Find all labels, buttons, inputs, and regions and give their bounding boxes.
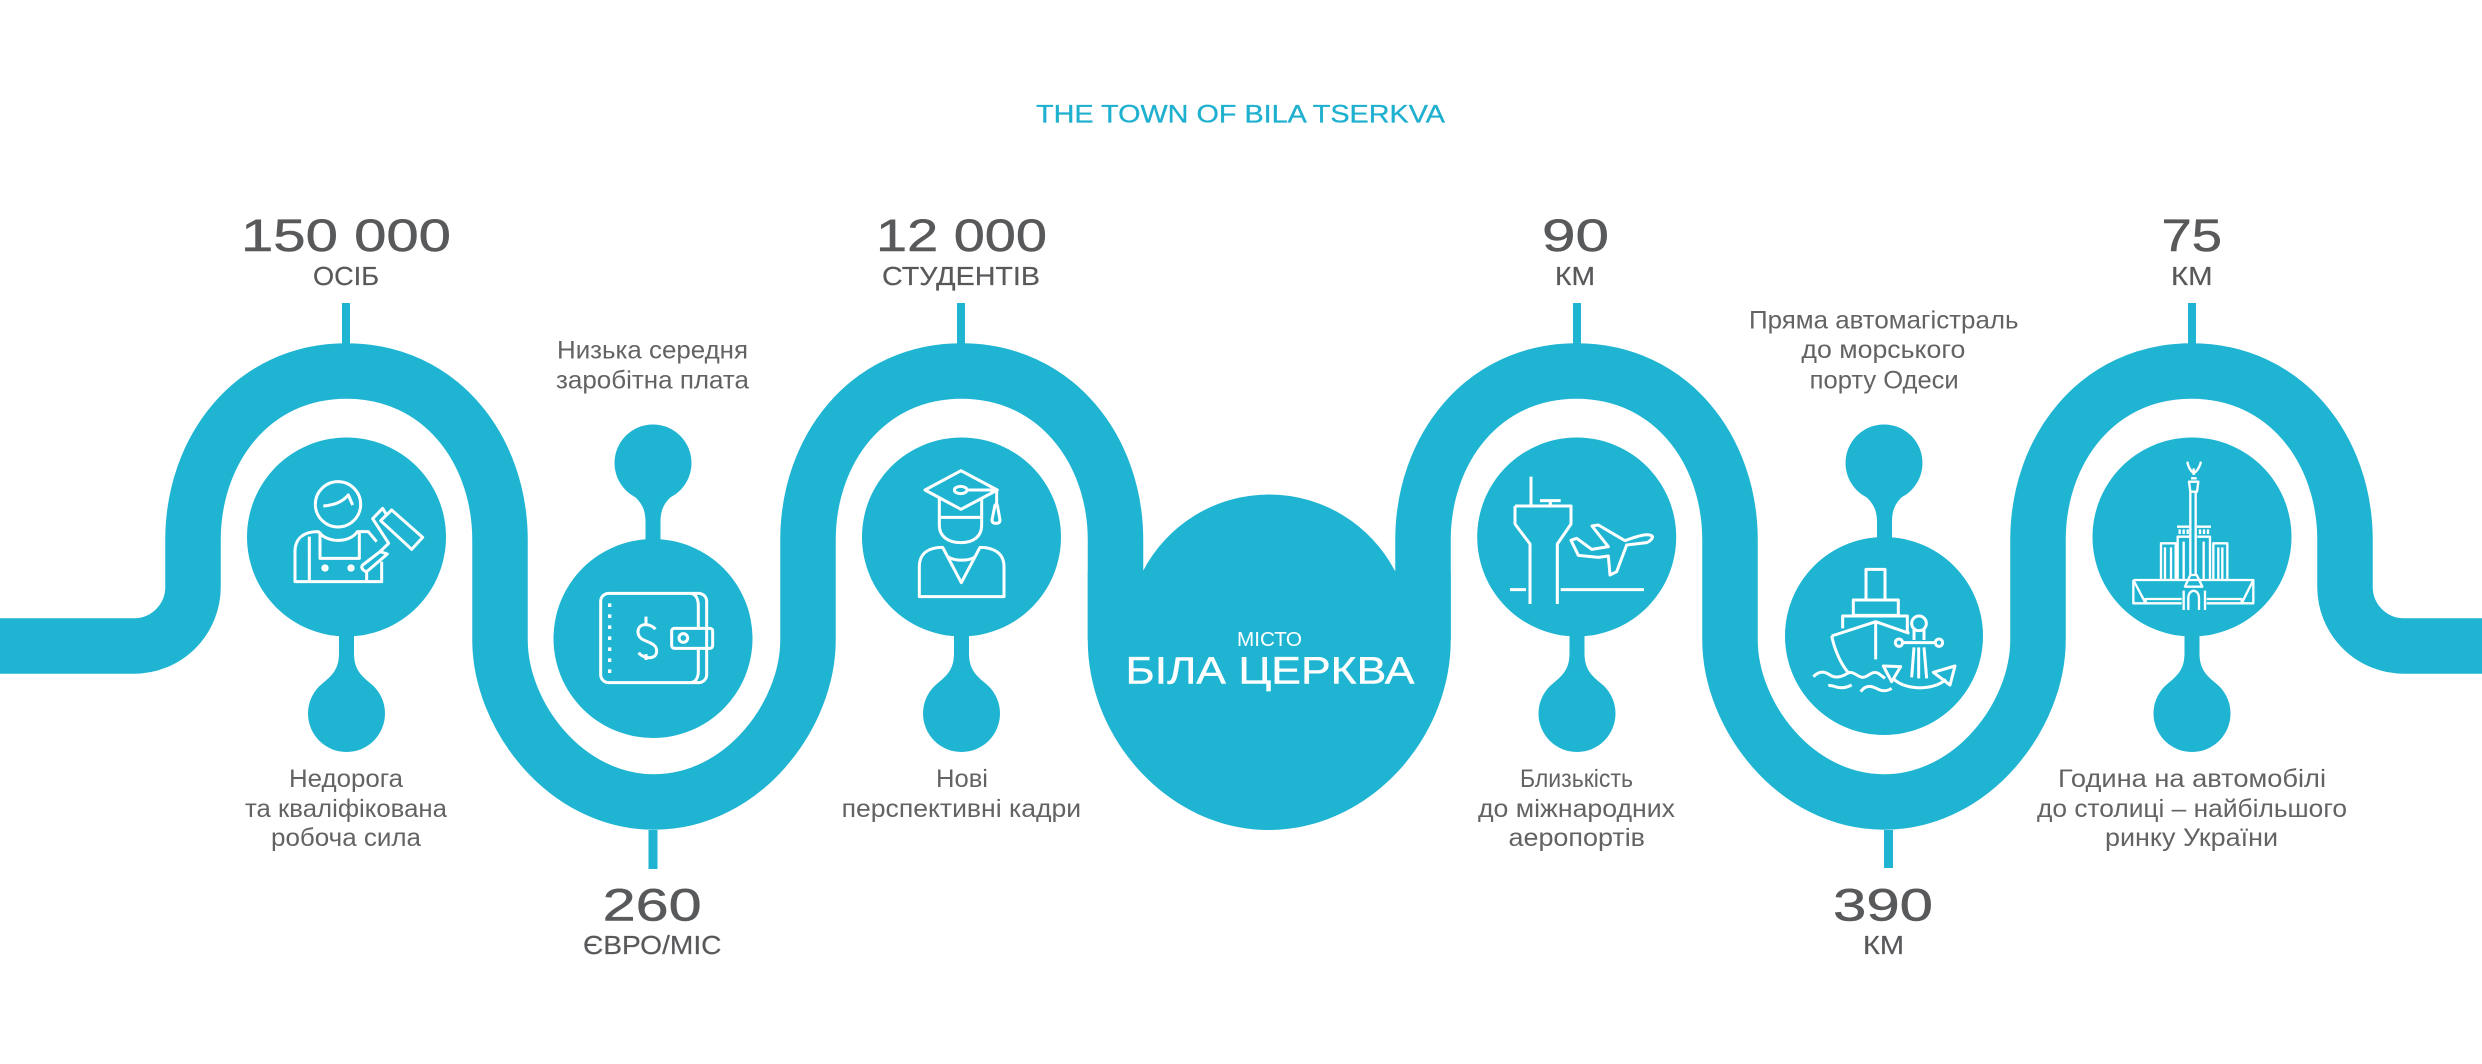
description [245,765,447,852]
stat: 390 km: КМ [1863,930,1904,960]
description: перспективні кадри [842,795,1081,823]
node circle with pin [2092,438,2292,752]
description: робоча сила [271,824,421,852]
description [1749,306,2018,394]
stat: 260 euro per month: ЄВРО/МІС [583,930,722,960]
description [1478,765,1676,852]
stat: 260 euro per month: 260 [603,880,702,930]
description: ринку України [2105,824,2278,852]
stat: 90 km [1542,210,1609,345]
stat: 75 km: 75 [2162,210,2222,261]
central circle: Bila Tserkva [1088,494,1451,830]
winding road band [0,371,2482,802]
icon: wallet [601,593,713,683]
description: та кваліфікована [245,795,447,823]
node circle with pin [1785,424,1983,735]
description: порту Одеси [1810,366,1959,394]
node circle with pin [1477,438,1676,752]
icon: control tower and plane [1510,477,1653,604]
stat: 150 000 people: ОСІБ [313,261,379,291]
stat: 12 000 students [876,210,1047,345]
description: Близькість [1520,765,1633,793]
stat: 90 km: КМ [1555,261,1595,291]
panel: airports [1477,210,1676,852]
panel: students [842,210,1081,823]
description [556,337,749,394]
panel: workforce [241,210,451,852]
description: Недорога [289,765,403,793]
stat: 260 euro per month [583,830,722,960]
panel: salary [554,337,752,960]
stat: 12 000 students: 12 000 [876,210,1047,261]
node circle with pin [554,424,752,738]
panel: capital [2037,210,2347,852]
icon: graduate [919,471,1004,597]
stat: 75 km [2162,210,2222,345]
stat: 12 000 students: СТУДЕНТІВ [882,261,1040,291]
stat: 150 000 people [241,210,451,345]
node circle with pin [862,438,1061,752]
description [842,765,1081,823]
title: THE TOWN OF BILA TSERKVA [1036,101,1445,129]
stat: 150 000 people: 150 000 [241,210,451,261]
icon: independence monument [2133,462,2253,610]
stat: 390 km [1833,830,1933,960]
description [2037,765,2347,852]
node circle with pin [247,438,446,752]
icon: painter with roller [295,482,423,582]
icon: ship and anchor [1813,569,1955,692]
description: Низька середня [557,337,748,365]
description: заробітна плата [556,366,749,394]
description: Година на автомобілі [2058,765,2326,793]
central circle: Bila Tserkva: БІЛА ЦЕРКВА [1126,651,1415,693]
description: до міжнародних [1478,795,1676,823]
description: Пряма автомагістраль [1749,306,2018,334]
stat: 390 km: 390 [1833,880,1933,930]
description: до морського [1801,336,1965,364]
stat: 90 km: 90 [1542,210,1609,261]
description: Нові [936,765,988,793]
description: аеропортів [1508,824,1645,852]
stat: 75 km: КМ [2171,261,2212,291]
central circle: Bila Tserkva: МІСТО [1237,629,1302,651]
panel: seaport [1749,306,2018,960]
description: до столиці – найбільшого [2037,795,2347,823]
